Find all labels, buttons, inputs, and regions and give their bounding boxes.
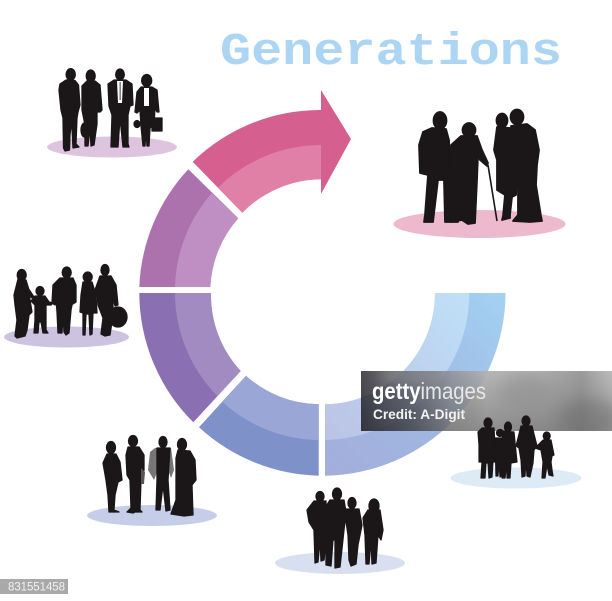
segment: light blue <box>325 293 506 476</box>
group: business people <box>47 69 177 158</box>
image id label: 831551458 <box>8 582 65 594</box>
group: children <box>450 416 582 488</box>
image id label <box>0 579 68 594</box>
watermark banner <box>361 371 612 431</box>
segment: orchid <box>139 169 238 287</box>
group: elderly people <box>394 110 566 238</box>
segment: violet <box>139 293 241 422</box>
segment: pink arrow <box>193 90 351 213</box>
watermark banner: Credit: A-Digit <box>373 407 465 422</box>
group: young adults talking <box>87 436 217 526</box>
cycle ring <box>139 90 506 476</box>
group: family with suitcase <box>4 264 129 348</box>
title: Generations <box>220 27 562 78</box>
group: teenagers walking <box>275 488 405 574</box>
watermark banner: gettyimages <box>372 378 486 404</box>
segment: periwinkle <box>199 376 319 476</box>
